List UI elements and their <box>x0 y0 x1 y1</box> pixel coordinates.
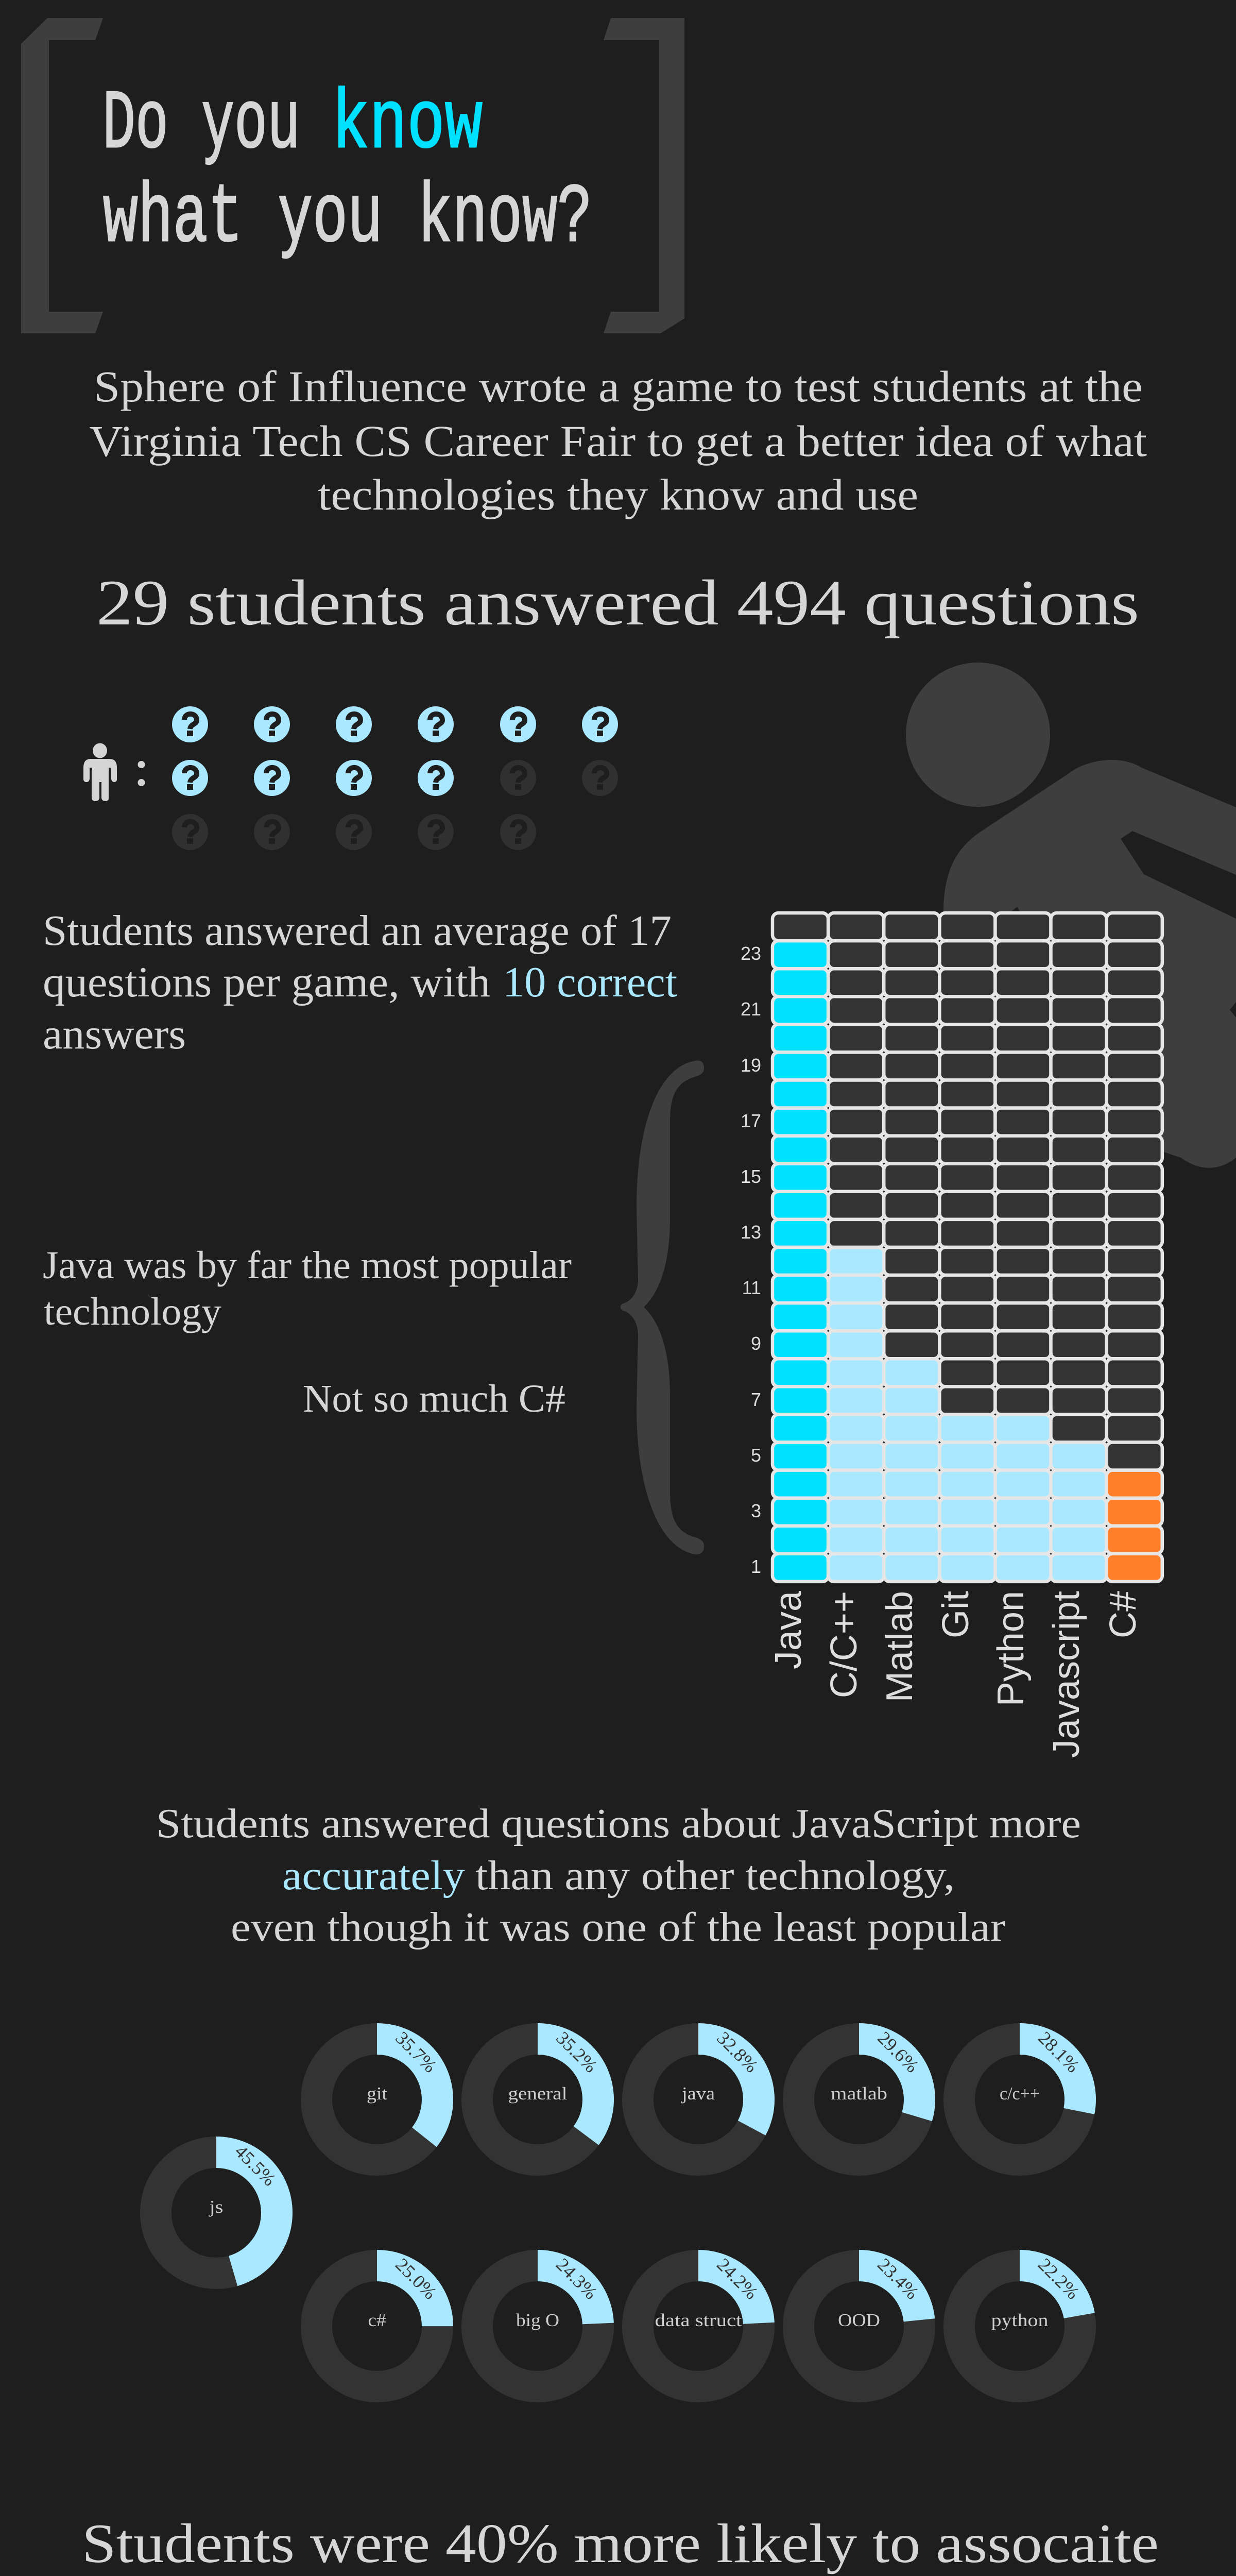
intro paragraph: technologies they know and use <box>318 470 918 519</box>
donut: general: general <box>508 2083 568 2104</box>
donut: c# <box>316 2254 441 2386</box>
column: C/C++ <box>828 913 884 1582</box>
donut: c#: c# <box>368 2310 386 2330</box>
donut: c/c++ <box>959 2027 1084 2160</box>
row number labels: 11 <box>742 1277 761 1298</box>
column: Git <box>939 913 995 1582</box>
donut: java: java <box>681 2083 715 2104</box>
row number labels: 9 <box>751 1333 761 1354</box>
text: java popularity <box>43 1244 572 1333</box>
column: Matlab <box>884 913 939 1582</box>
column: Java <box>772 913 828 1582</box>
donut: c#: 25.0% <box>391 2254 441 2303</box>
donut: big O: big O <box>516 2310 559 2330</box>
column labels: C# <box>1103 1591 1144 1638</box>
row number labels: 23 <box>741 943 761 964</box>
row number labels: 15 <box>741 1166 761 1187</box>
leg gap wedge <box>1009 907 1021 913</box>
intro paragraph <box>89 362 1147 519</box>
donut: git: git <box>367 2083 387 2104</box>
donut charts: accuracy by topic <box>156 2027 1084 2386</box>
text: JavaScript accuracy: even though it was one of the least popular <box>231 1905 1005 1950</box>
donut: data struct: 24.2% <box>713 2254 762 2303</box>
row number labels: 19 <box>741 1055 761 1076</box>
column labels: Java <box>768 1590 809 1669</box>
row number labels <box>741 943 761 1577</box>
title line 1: Do you <box>102 77 300 172</box>
colon <box>138 761 145 786</box>
donut: data struct: data struct <box>655 2310 742 2330</box>
headline: students and questions: 29 students answered 494 questions <box>96 567 1139 639</box>
column labels: C/C++ <box>823 1591 865 1698</box>
donut: general <box>477 2027 602 2160</box>
text: average questions per game: answers <box>43 1010 186 1058</box>
icon: person <box>83 743 117 801</box>
donut: python: 22.2% <box>1034 2254 1084 2303</box>
title line 1: know <box>332 77 483 172</box>
remaining question icons <box>172 760 618 850</box>
text: average questions per game <box>43 907 677 1058</box>
column labels: Javascript <box>1046 1591 1087 1758</box>
row number labels: 5 <box>751 1445 761 1466</box>
title block with brackets <box>21 18 684 333</box>
waffle chart: technology popularity <box>741 913 1162 1758</box>
text: average questions per game: questions per game, with <box>43 958 490 1006</box>
person head <box>906 663 1050 807</box>
donut: data struct <box>638 2254 762 2386</box>
donut: matlab <box>798 2027 923 2160</box>
donut: matlab: matlab <box>831 2083 887 2104</box>
column labels: Python <box>990 1591 1032 1706</box>
donut: java <box>638 2027 762 2160</box>
person body <box>943 760 1236 1168</box>
donut: c/c++: 28.1% <box>1034 2027 1084 2077</box>
left bracket <box>21 18 103 333</box>
large statement: Map data structure: Students were 40% more likely to assocaite <box>82 2513 1159 2574</box>
text: average questions per game: 10 correct <box>503 958 677 1006</box>
text: JavaScript accuracy: than any other technology, <box>475 1853 955 1899</box>
row number labels: 7 <box>751 1389 761 1410</box>
intro paragraph: Virginia Tech CS Career Fair to get a better idea of what <box>89 416 1147 466</box>
curly brace <box>621 1060 704 1554</box>
text: average questions per game: Students answered an average of 17 <box>43 907 672 955</box>
row number labels: 1 <box>751 1556 761 1577</box>
donut: OOD: OOD <box>838 2310 880 2330</box>
correct question icons <box>172 706 618 796</box>
donut: general: 35.2% <box>552 2027 602 2077</box>
title line 2: what you know? <box>103 171 592 266</box>
donut: big O: 24.3% <box>552 2254 602 2303</box>
column labels <box>768 1590 1144 1758</box>
donut: js: js <box>208 2197 224 2217</box>
text: JavaScript accuracy <box>156 1801 1081 1950</box>
donut: OOD <box>798 2254 923 2386</box>
donut: matlab: 29.6% <box>873 2027 923 2077</box>
row number labels: 3 <box>751 1500 761 1521</box>
donut: java: 32.8% <box>713 2027 762 2077</box>
column labels: Matlab <box>879 1591 920 1702</box>
text: not so much C#: Not so much C# <box>303 1377 565 1420</box>
donut: js: 45.5% <box>231 2141 280 2190</box>
intro paragraph: Sphere of Influence wrote a game to test students at the <box>94 362 1143 411</box>
donut: python: python <box>991 2310 1049 2330</box>
pictogram: questions per student <box>83 706 618 850</box>
text: java popularity: Java was by far the most popular <box>43 1244 572 1287</box>
text: JavaScript accuracy: accurately <box>282 1853 465 1899</box>
row number labels: 13 <box>741 1222 761 1243</box>
column: Javascript <box>1051 913 1107 1582</box>
donut: git <box>316 2027 441 2160</box>
text: JavaScript accuracy: Students answered questions about JavaScript more <box>156 1801 1081 1846</box>
donut: git: 35.7% <box>391 2027 441 2077</box>
column: Python <box>995 913 1051 1582</box>
donut: python <box>959 2254 1084 2386</box>
large background person figure <box>906 663 1236 1168</box>
column labels: Git <box>935 1591 976 1638</box>
donut: js <box>156 2141 280 2273</box>
donut: big O <box>477 2254 602 2386</box>
donut: c/c++: c/c++ <box>1000 2083 1040 2104</box>
text: java popularity: technology <box>44 1290 221 1333</box>
row number labels: 21 <box>741 998 761 1020</box>
right bracket <box>604 18 684 333</box>
row number labels: 17 <box>741 1110 761 1131</box>
donut: OOD: 23.4% <box>873 2254 923 2303</box>
column: C# <box>1107 913 1162 1582</box>
